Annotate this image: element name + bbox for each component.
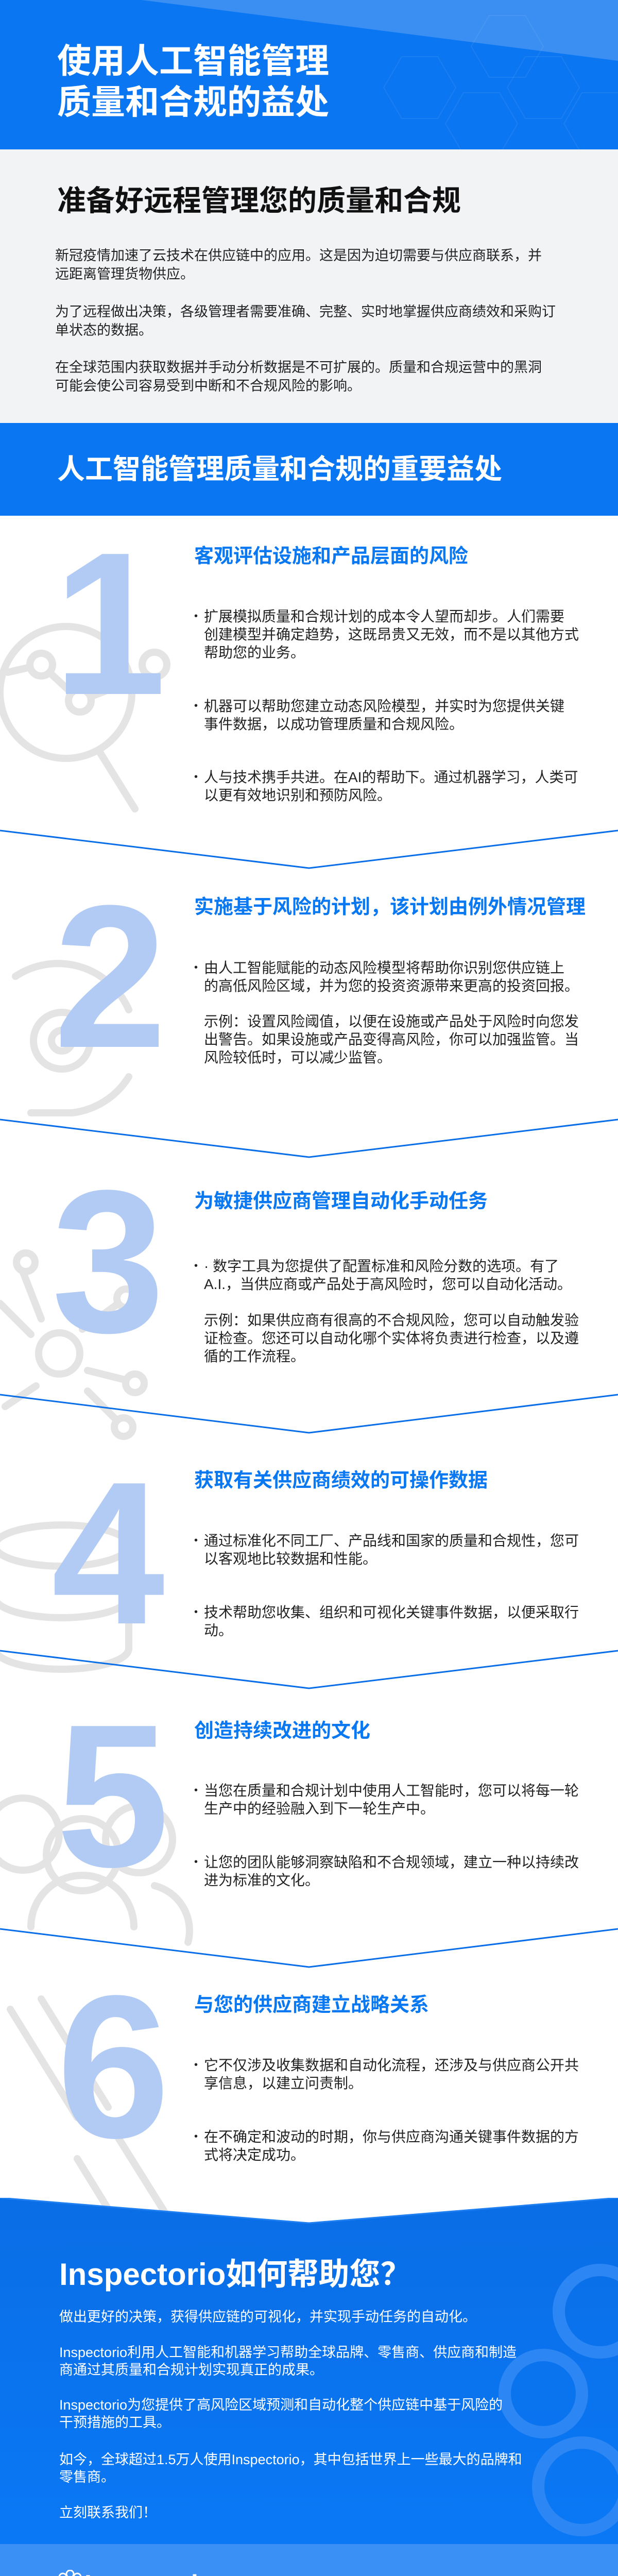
bullet 1.1: 扩展模拟质量和合规计划的成本令人望而却步。人们需要	[204, 608, 564, 624]
title	[57, 42, 329, 121]
bullet 4.2	[194, 1603, 579, 1639]
panel: how inspectorio helps	[0, 2198, 618, 2544]
footer paragraph 4	[59, 2452, 522, 2485]
bullet 6.2: 式将决定成功。	[204, 2147, 305, 2163]
bullet 1.2: 事件数据，以成功管理质量和合规风险。	[204, 716, 464, 732]
bullet 6.2	[194, 2128, 579, 2164]
number 1: 1	[53, 510, 166, 737]
bullet 3.1	[194, 1257, 572, 1293]
footer paragraph 2	[59, 2345, 517, 2378]
example 3: 循的工作流程。	[204, 1348, 305, 1364]
intro paragraph 3: 在全球范围内获取数据并手动分析数据是不可扩展的。质量和合规运营中的黑洞	[55, 360, 542, 375]
example 2: 出警告。如果设施或产品变得高风险，你可以加强监管。当	[204, 1031, 579, 1047]
footer bar	[0, 2544, 618, 2576]
bullet 4.1	[194, 1532, 579, 1568]
bullet 4.2: 技术帮助您收集、组织和可视化关键事件数据，以便采取行	[204, 1604, 579, 1620]
header panel	[0, 0, 618, 149]
bullet 4.2: 动。	[204, 1622, 233, 1638]
heading 3: 为敏捷供应商管理自动化手动任务	[194, 1191, 488, 1212]
footer paragraph 4: 零售商。	[59, 2469, 115, 2485]
icon 6 link	[10, 2009, 77, 2117]
heading 2: 实施基于风险的计划，该计划由例外情况管理	[194, 896, 586, 918]
bullet 5.1: 当您在质量和合规计划中使用人工智能时，您可以将每一轮	[204, 1783, 579, 1799]
footer paragraph 2: Inspectorio利用人工智能和机器学习帮助全球品牌、零售商、供应商和制造	[59, 2345, 517, 2360]
number 3: 3	[52, 1147, 165, 1375]
panel: intro	[0, 149, 618, 423]
footer paragraph 2: 商通过其质量和合规计划实现真正的成果。	[59, 2362, 323, 2378]
heading 6: 与您的供应商建立战略关系	[194, 1994, 429, 2016]
example 2: 示例：设置风险阈值，以便在设施或产品处于风险时向您发	[204, 1013, 579, 1029]
footer paragraph 1: 做出更好的决策，获得供应链的可视化，并实现手动任务的自动化。	[59, 2309, 476, 2325]
intro paragraph 1: 新冠疫情加速了云技术在供应链中的应用。这是因为迫切需要与供应商联系，并	[55, 248, 542, 263]
bullet 1.2	[194, 697, 564, 733]
bullet 1.2: 机器可以帮助您建立动态风险模型，并实时为您提供关键	[204, 698, 564, 714]
panel: benefit 4	[194, 1470, 579, 1638]
bullet 3.1: A.I.，当供应商或产品处于高风险时，您可以自动化活动。	[204, 1276, 572, 1292]
heading 1: 客观评估设施和产品层面的风险	[194, 546, 468, 567]
example 2: 风险较低时，可以减少监管。	[204, 1049, 391, 1065]
icon 1 magnifier	[0, 626, 132, 758]
intro paragraph 2: 为了远程做出决策，各级管理者需要准确、完整、实时地掌握供应商绩效和采购订	[55, 304, 556, 319]
bullet 1.1: 创建模型并确定趋势，这既昂贵又无效，而不是以其他方式	[204, 626, 579, 642]
panel: benefit 3	[194, 1191, 579, 1364]
bullet 6.1: 它不仅涉及收集数据和自动化流程，还涉及与供应商公开共	[204, 2057, 579, 2073]
intro paragraph 1: 远距离管理货物供应。	[55, 266, 194, 282]
bullet 6.1	[194, 2056, 579, 2092]
intro heading: 准备好远程管理您的质量和合规	[57, 184, 461, 217]
bullet 2.1: 的高低风险区域，并为您的投资资源带来更高的投资回报。	[204, 978, 579, 994]
banner heading	[0, 423, 618, 516]
heading 4: 获取有关供应商绩效的可操作数据	[194, 1470, 488, 1492]
footer paragraph 5: 立刻联系我们！	[59, 2505, 157, 2520]
number 5: 5	[56, 1682, 169, 1909]
intro paragraph 3: 可能会使公司容易受到中断和不合规风险的影响。	[55, 378, 361, 394]
bullet 2.1: 由人工智能赋能的动态风险模型将帮助你识别您供应链上	[204, 960, 564, 976]
footer paragraph 4: 如今，全球超过1.5万人使用Inspectorio，其中包括世界上一些最大的品牌和	[59, 2452, 522, 2467]
bullet 1.3	[194, 768, 578, 804]
icon 5 people	[0, 1798, 59, 1870]
footer paragraph 3: 干预措施的工具。	[59, 2415, 170, 2430]
bullet 5.2	[194, 1853, 579, 1889]
intro paragraph 3	[55, 360, 542, 394]
panel: benefit 6	[194, 1994, 579, 2163]
bullet 4.1: 通过标准化不同工厂、产品线和国家的质量和合规性，您可	[204, 1533, 579, 1549]
panel: benefit 5	[194, 1720, 579, 1888]
footer paragraph 3	[59, 2397, 503, 2430]
bullet 1.3: 以更有效地识别和预防风险。	[204, 787, 391, 803]
bullet 6.2: 在不确定和波动的时期，你与供应商沟通关键事件数据的方	[204, 2129, 579, 2145]
bullet 5.1	[194, 1782, 579, 1818]
bullet 5.2: 让您的团队能够洞察缺陷和不合规领域，建立一种以持续改	[204, 1854, 579, 1870]
bullet 3.1: · 数字工具为您提供了配置标准和风险分数的选项。有了	[204, 1258, 559, 1274]
bullet 1.1	[194, 607, 579, 662]
intro paragraph 2: 单状态的数据。	[55, 323, 152, 338]
icon 3 network	[39, 1333, 80, 1374]
panel: benefit 1	[194, 546, 579, 803]
bullet 5.2: 进为标准的文化。	[204, 1872, 319, 1888]
bullet 4.1: 以客观地比较数据和性能。	[204, 1551, 377, 1567]
number 6: 6	[57, 1953, 170, 2180]
title: 质量和合规的益处	[57, 83, 329, 121]
icon 4 database	[0, 1525, 129, 1566]
bullet 5.1: 生产中的经验融入到下一轮生产中。	[204, 1801, 435, 1817]
panel: benefit 2	[194, 896, 586, 1065]
bullet 1.3: 人与技术携手共进。在AI的帮助下。通过机器学习，人类可	[204, 769, 578, 785]
number 2: 2	[54, 862, 167, 1090]
banner heading: 人工智能管理质量和合规的重要益处	[57, 454, 502, 485]
number 4: 4	[52, 1439, 166, 1667]
intro paragraph 1	[55, 248, 542, 282]
logo	[59, 2570, 212, 2576]
footer heading: Inspectorio如何帮助您？	[59, 2257, 411, 2292]
heading 5: 创造持续改进的文化	[194, 1720, 370, 1742]
title: 使用人工智能管理	[57, 42, 329, 80]
bullet 6.1: 享信息，以建立问责制。	[204, 2075, 363, 2091]
bullet 1.1: 帮助您的业务。	[204, 645, 305, 660]
icon: logo rings	[59, 2570, 81, 2576]
intro paragraph 2	[55, 304, 556, 338]
example 3	[204, 1312, 579, 1364]
example 3: 示例：如果供应商有很高的不合规风险，您可以自动触发验	[204, 1312, 579, 1328]
example 3: 证检查。您还可以自动化哪个实体将负责进行检查，以及遵	[204, 1330, 579, 1346]
example 2	[204, 1013, 579, 1065]
bullet 2.1	[194, 959, 579, 995]
footer paragraph 3: Inspectorio为您提供了高风险区域预测和自动化整个供应链中基于风险的	[59, 2397, 503, 2413]
icon 2 gear cycle	[15, 963, 129, 1010]
